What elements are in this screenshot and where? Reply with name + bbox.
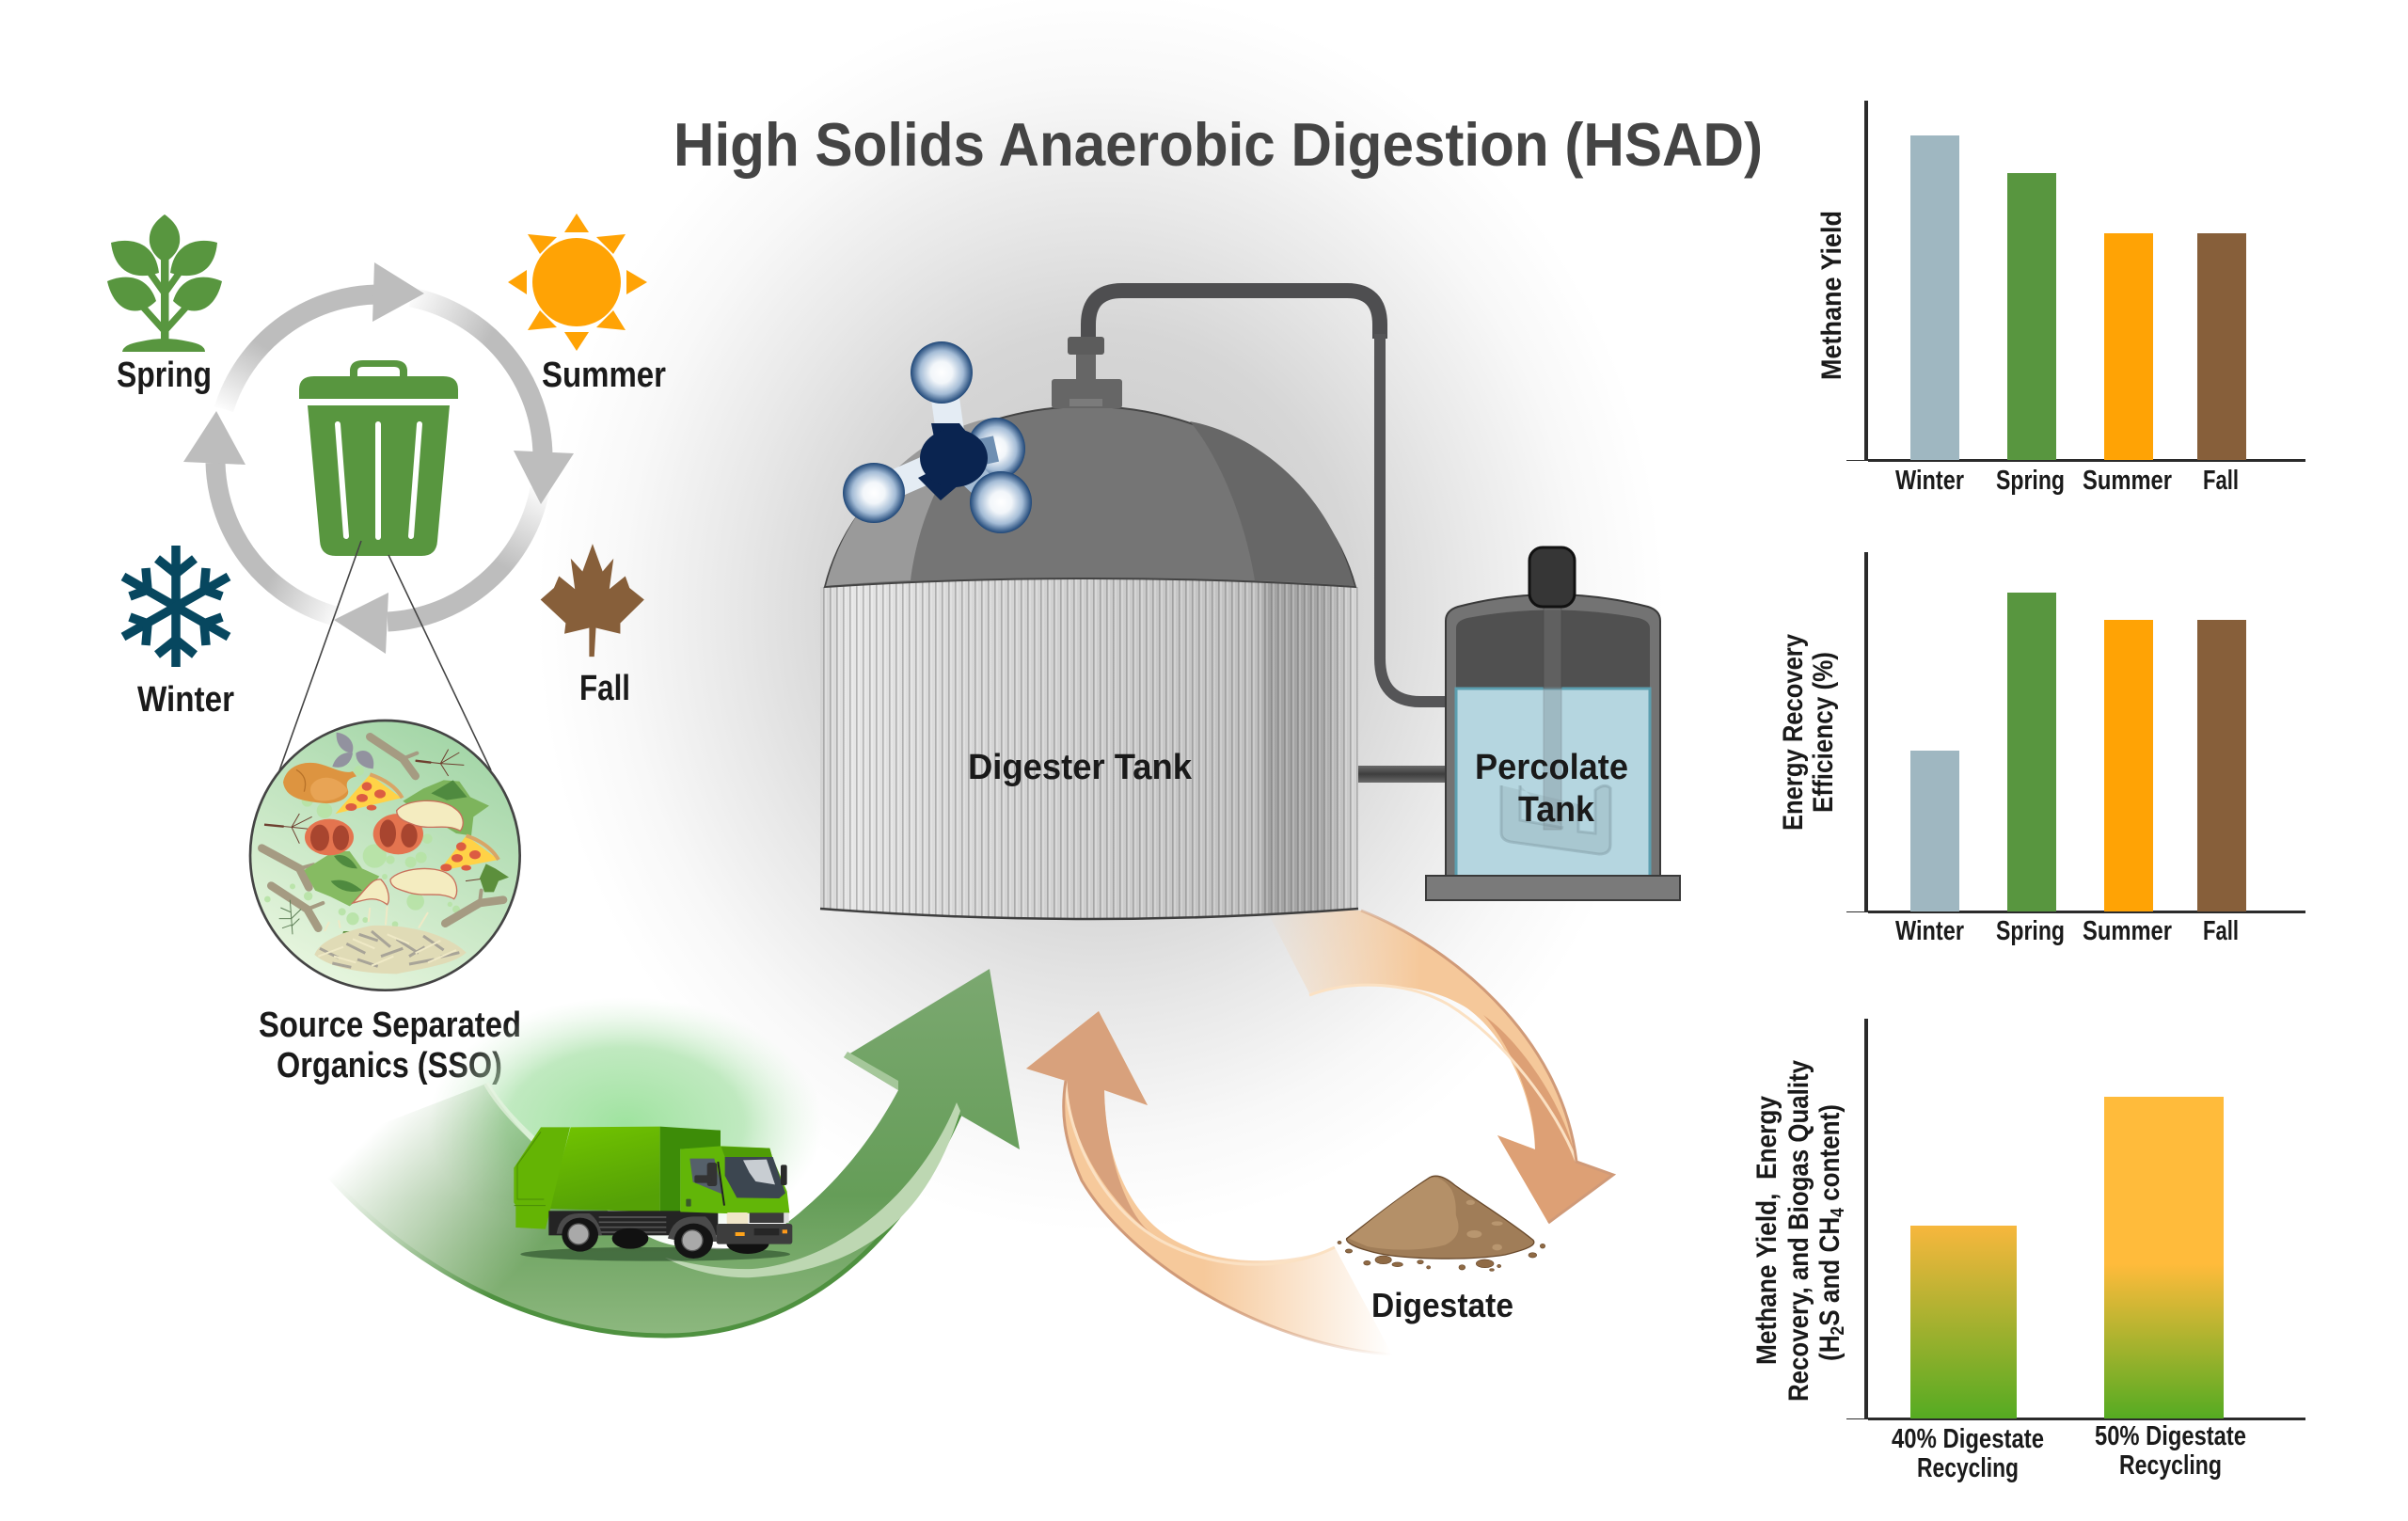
x axis labels: Winter (1895, 466, 1964, 496)
percolate tank (1426, 547, 1680, 900)
stirrer shaft in water (1544, 689, 1561, 830)
liquid connector pipe (1354, 766, 1449, 783)
twigs (264, 750, 484, 974)
pizza slice (336, 774, 403, 814)
label: digestate: Digestate (1371, 1286, 1513, 1324)
label: percolate tank: Percolate (1475, 748, 1628, 787)
chart: methane yield by season (1816, 101, 2305, 496)
pine sprig (279, 900, 301, 934)
label: Winter: Winter (137, 680, 234, 720)
background glow (536, 0, 1665, 1232)
icon: digestate pile (1338, 1176, 1545, 1271)
arrow: peach digestate output arrow (1265, 908, 1613, 1223)
axes (1846, 101, 2305, 462)
basil leaves (332, 733, 373, 768)
chart: energy recovery efficiency by season (1778, 552, 2305, 946)
x axis labels (1895, 916, 2239, 946)
label: source separated organics (259, 1006, 521, 1085)
motor (1529, 547, 1575, 607)
ivy leaves (341, 863, 509, 957)
label: source separated organics: Organics (SSO) (277, 1046, 502, 1085)
icon: fall maple leaf (541, 544, 644, 657)
y axis label: Efficiency (%) (1808, 652, 1839, 813)
x axis labels: Spring (1996, 916, 2065, 946)
lettuce (304, 780, 489, 906)
x axis labels: Summer (2083, 916, 2172, 946)
axes (1846, 552, 2305, 913)
axes (1846, 1019, 2305, 1420)
y axis label (1751, 1060, 1848, 1402)
x axis labels: Summer (2083, 466, 2172, 496)
x axis labels: Recycling (2119, 1450, 2222, 1481)
gas pipe (1088, 291, 1447, 702)
bars (1910, 135, 2246, 460)
stirrer shaft in air (1544, 607, 1561, 689)
circular arrows (183, 262, 574, 654)
label: Fall: Fall (579, 669, 630, 708)
panel: seasonal waste cycle (107, 214, 666, 720)
digester dome (825, 406, 1355, 587)
title: High Solids Anaerobic Digestion (HSAD) (673, 110, 1763, 179)
x axis labels: Fall (2203, 916, 2239, 946)
y axis label: Methane Yield, Energy (1751, 1096, 1782, 1365)
tomato (373, 814, 423, 854)
apple peels (353, 800, 463, 905)
chart: digestate recycling comparison (1751, 1019, 2305, 1483)
branches (261, 737, 503, 928)
y axis label: (H (1814, 1331, 1846, 1361)
dome valve (1052, 337, 1122, 408)
tomato (305, 819, 354, 855)
panel: digester tank system (820, 291, 1680, 919)
icon: spring plant (107, 214, 222, 352)
panel: source separated organics circle (250, 721, 520, 990)
x axis labels (1895, 466, 2239, 496)
label: percolate tank: Tank (1518, 790, 1595, 830)
icon: summer sun (508, 214, 647, 351)
arrow: green feedstock arrow (309, 969, 1020, 1336)
y axis label: Methane Yield (1816, 211, 1847, 380)
y axis label: Energy Recovery (1778, 634, 1809, 831)
label: Summer: Summer (542, 356, 666, 395)
y axis label: Recovery, and Biogas Quality (1783, 1060, 1814, 1402)
y axis label: S and CH (1814, 1217, 1846, 1326)
y axis label: 2 (1828, 1326, 1848, 1335)
x axis labels: 50% Digestate (2095, 1421, 2246, 1451)
x axis labels: Winter (1895, 916, 1964, 946)
icon: winter snowflake (123, 546, 229, 667)
arrow: peach digestate recycle arrow (1026, 1011, 1392, 1355)
x axis labels (1892, 1421, 2246, 1483)
label: source separated organics: Source Separated (259, 1006, 521, 1045)
y axis label: content) (1814, 1104, 1846, 1208)
green glow behind truck (428, 997, 823, 1251)
label: percolate tank (1475, 748, 1628, 830)
shredded pile (314, 906, 467, 974)
x axis labels: 40% Digestate (1892, 1424, 2044, 1454)
icon: methane molecule (843, 341, 1032, 533)
y axis label (1778, 634, 1839, 831)
green specks (264, 766, 460, 927)
x axis labels: Recycling (1917, 1453, 2019, 1483)
label: Spring: Spring (117, 356, 212, 395)
icon: garbage truck (514, 1127, 792, 1261)
bars (1910, 1097, 2224, 1418)
label: digester tank: Digester Tank (968, 748, 1193, 787)
x axis labels: Spring (1996, 466, 2065, 496)
digester tank body (820, 579, 1358, 919)
y axis label: 4 (1828, 1207, 1848, 1217)
bars (1910, 593, 2246, 911)
icon: trash bin (299, 360, 458, 556)
x axis labels: Fall (2203, 466, 2239, 496)
zoom lines from bin to organics (278, 541, 491, 773)
impeller (1501, 785, 1610, 854)
pizza slice (439, 835, 499, 871)
chicken (283, 763, 356, 803)
